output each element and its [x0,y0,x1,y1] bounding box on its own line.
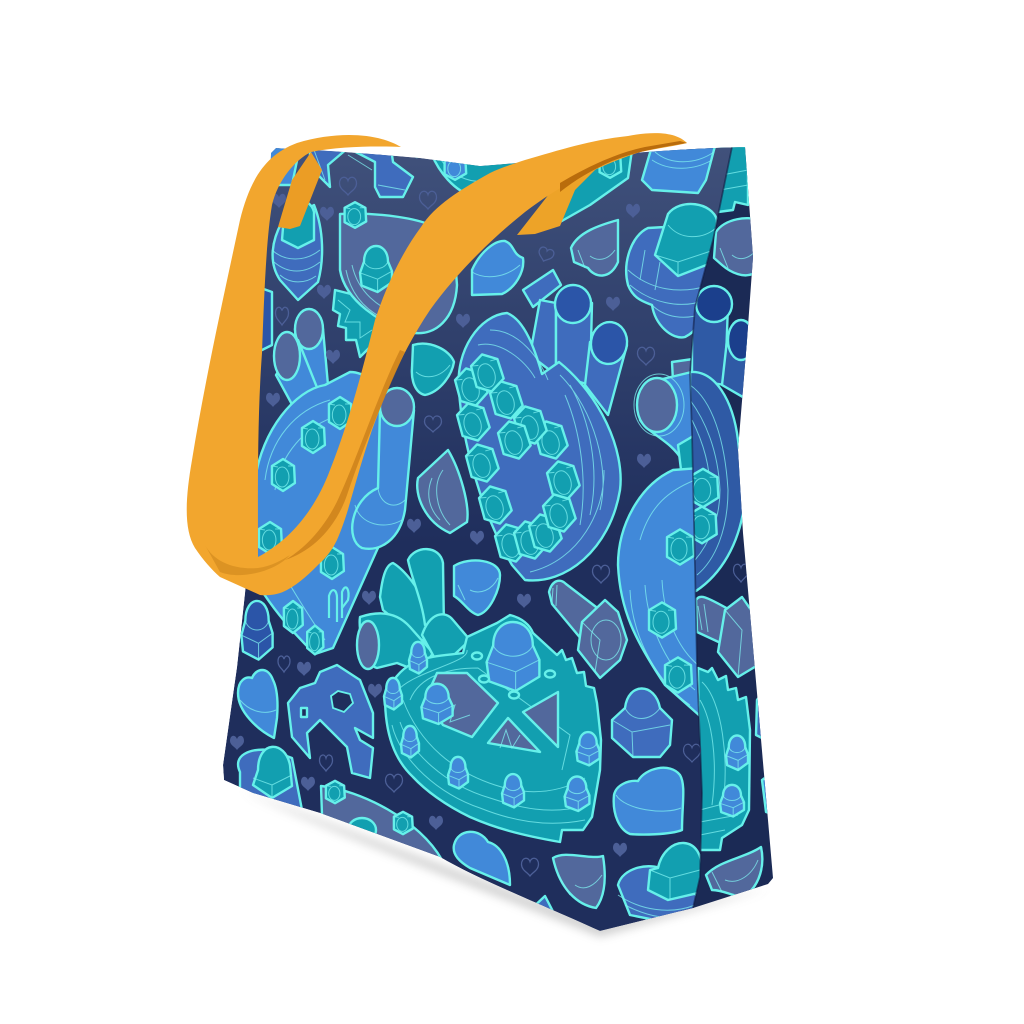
gusset: grey bolt [696,597,758,677]
pipes [523,270,630,415]
strap top dark edge [560,141,687,192]
gusset: right edge blue shapes [754,697,768,814]
pattern: bottom grey half heart [321,781,442,860]
strap fold shadow [285,350,405,560]
pattern: left capnut [241,601,273,660]
fabric top highlight [258,148,732,452]
gusset: teal top piece [718,146,748,212]
pattern: big royal heart with bolt ring [453,270,630,580]
pattern: blue cap nut lower right [612,688,672,757]
front panel [200,130,740,950]
pattern: right big blue heart with pipes [618,358,700,716]
orange strap [187,133,687,595]
pattern: bottom blue heart [454,832,510,885]
gusset fabric [680,147,773,912]
pattern: bottom teal nut with stack [618,843,702,925]
pattern: teal plate behind strap [560,150,632,222]
pattern: top teal heart [433,160,516,192]
strap main band [187,133,687,595]
pattern: grey half heart with nuts and gear teeth [333,202,457,357]
pattern: left stacked heart with bolt [272,201,322,300]
gusset: blue heart with pipes and nuts [690,284,748,592]
fabric background [200,130,740,950]
logo mark [329,587,349,622]
bolt ring [453,351,582,565]
pattern: top-left corner blue [270,148,298,186]
pattern: bottom triangle bits [528,896,560,925]
teal lobes and pipes [357,549,470,672]
pattern: grey tilted heart centre [417,450,468,533]
pattern: blue wrench [288,665,373,778]
strap back tab right [517,148,640,235]
pattern: small hearts [230,194,651,857]
strap inner loop shade [205,545,290,575]
pattern: outlined hearts [276,177,654,876]
pattern: grey hex bolt [549,581,627,678]
gusset fold line [690,147,732,908]
gusset small hearts [684,564,748,762]
pattern: teal heart [412,344,454,395]
pattern: top right hex block [642,146,715,193]
pattern: left bright blue heart with pipes [255,287,414,654]
gusset: teal heart with teeth [698,668,750,850]
pattern: top wrench [308,150,418,198]
pattern: stacked heart with teal bolt [626,204,717,337]
pattern: grey heart right top [571,220,618,276]
pattern: blue heart below centre [454,560,500,615]
pattern: blue heart centre top [472,241,523,295]
pattern: bottom grey heart [553,855,605,908]
tote bag body [223,147,773,931]
pattern: teal big heart with pipes [357,549,601,842]
pattern: left blue heart [238,670,278,738]
ground shadow [240,790,770,936]
pattern: blue heart lower right [614,768,683,835]
strap back tab left [278,152,322,229]
pipe elbow [352,410,414,549]
pattern: bottom left teal nut with stack [238,747,302,810]
gusset: grey heart [714,218,756,275]
windows [425,673,558,752]
gusset: grey heart bottom [706,847,762,896]
